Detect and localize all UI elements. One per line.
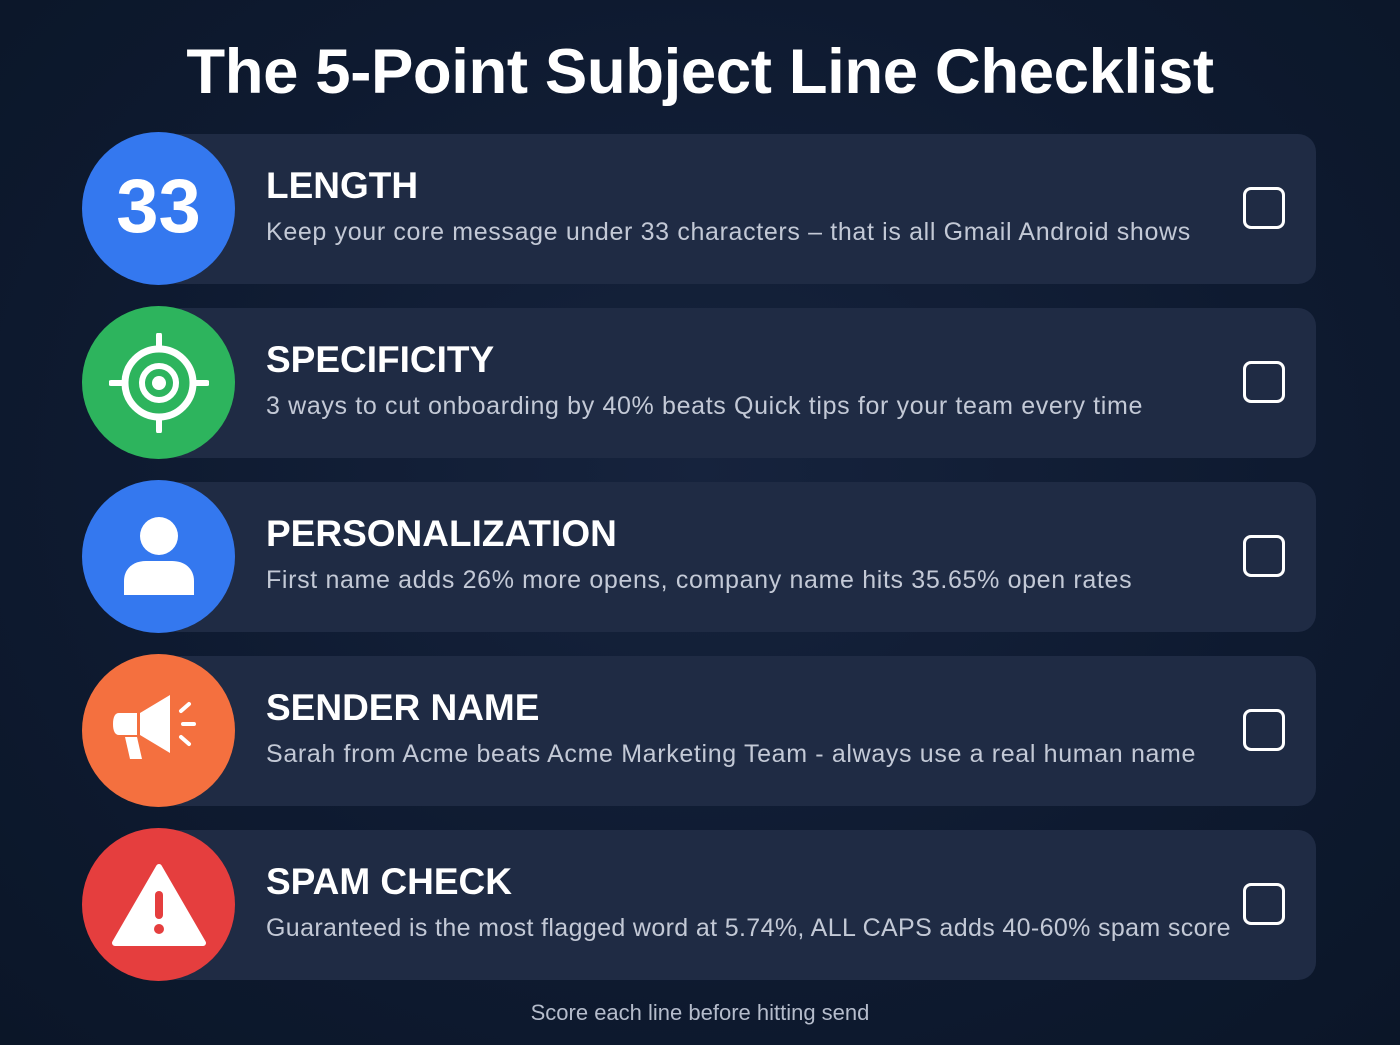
row: specificity <box>82 306 1316 459</box>
description: length: Keep your core message under 33 characters – that is all Gmail Android shows <box>266 218 1191 246</box>
checkbox <box>1243 709 1285 751</box>
checkbox <box>1243 361 1285 403</box>
heading: sender name: SENDER NAME <box>266 687 539 728</box>
description: sender name: Sarah from Acme beats Acme Marketing Team - always use a real human name <box>266 740 1196 768</box>
icon: target <box>82 306 235 459</box>
title: The 5-Point Subject Line Checklist <box>186 37 1214 107</box>
row: personalization <box>82 480 1316 633</box>
description: spam check: Guaranteed is the most flagged word at 5.74%, ALL CAPS adds 40-60% spam score <box>266 914 1231 942</box>
heading: length: LENGTH <box>266 165 418 206</box>
description: specificity: 3 ways to cut onboarding by 40% beats Quick tips for your team every time <box>266 392 1143 420</box>
footer note: Score each line before hitting send <box>531 1000 869 1025</box>
description: personalization: First name adds 26% more opens, company name hits 35.65% open rates <box>266 566 1132 594</box>
icon: megaphone <box>82 654 235 807</box>
icon: 33: 33 <box>116 164 201 249</box>
row: length <box>82 132 1316 285</box>
heading: specificity: SPECIFICITY <box>266 339 494 380</box>
heading: spam check: SPAM CHECK <box>266 861 512 902</box>
icon: warning <box>82 828 235 981</box>
icon: person <box>82 480 235 633</box>
checkbox <box>1243 535 1285 577</box>
icon: 33 <box>82 132 235 285</box>
checkbox <box>1243 883 1285 925</box>
checkbox <box>1243 187 1285 229</box>
row: spam check <box>82 828 1316 981</box>
row: sender name <box>82 654 1316 807</box>
heading: personalization: PERSONALIZATION <box>266 513 617 554</box>
